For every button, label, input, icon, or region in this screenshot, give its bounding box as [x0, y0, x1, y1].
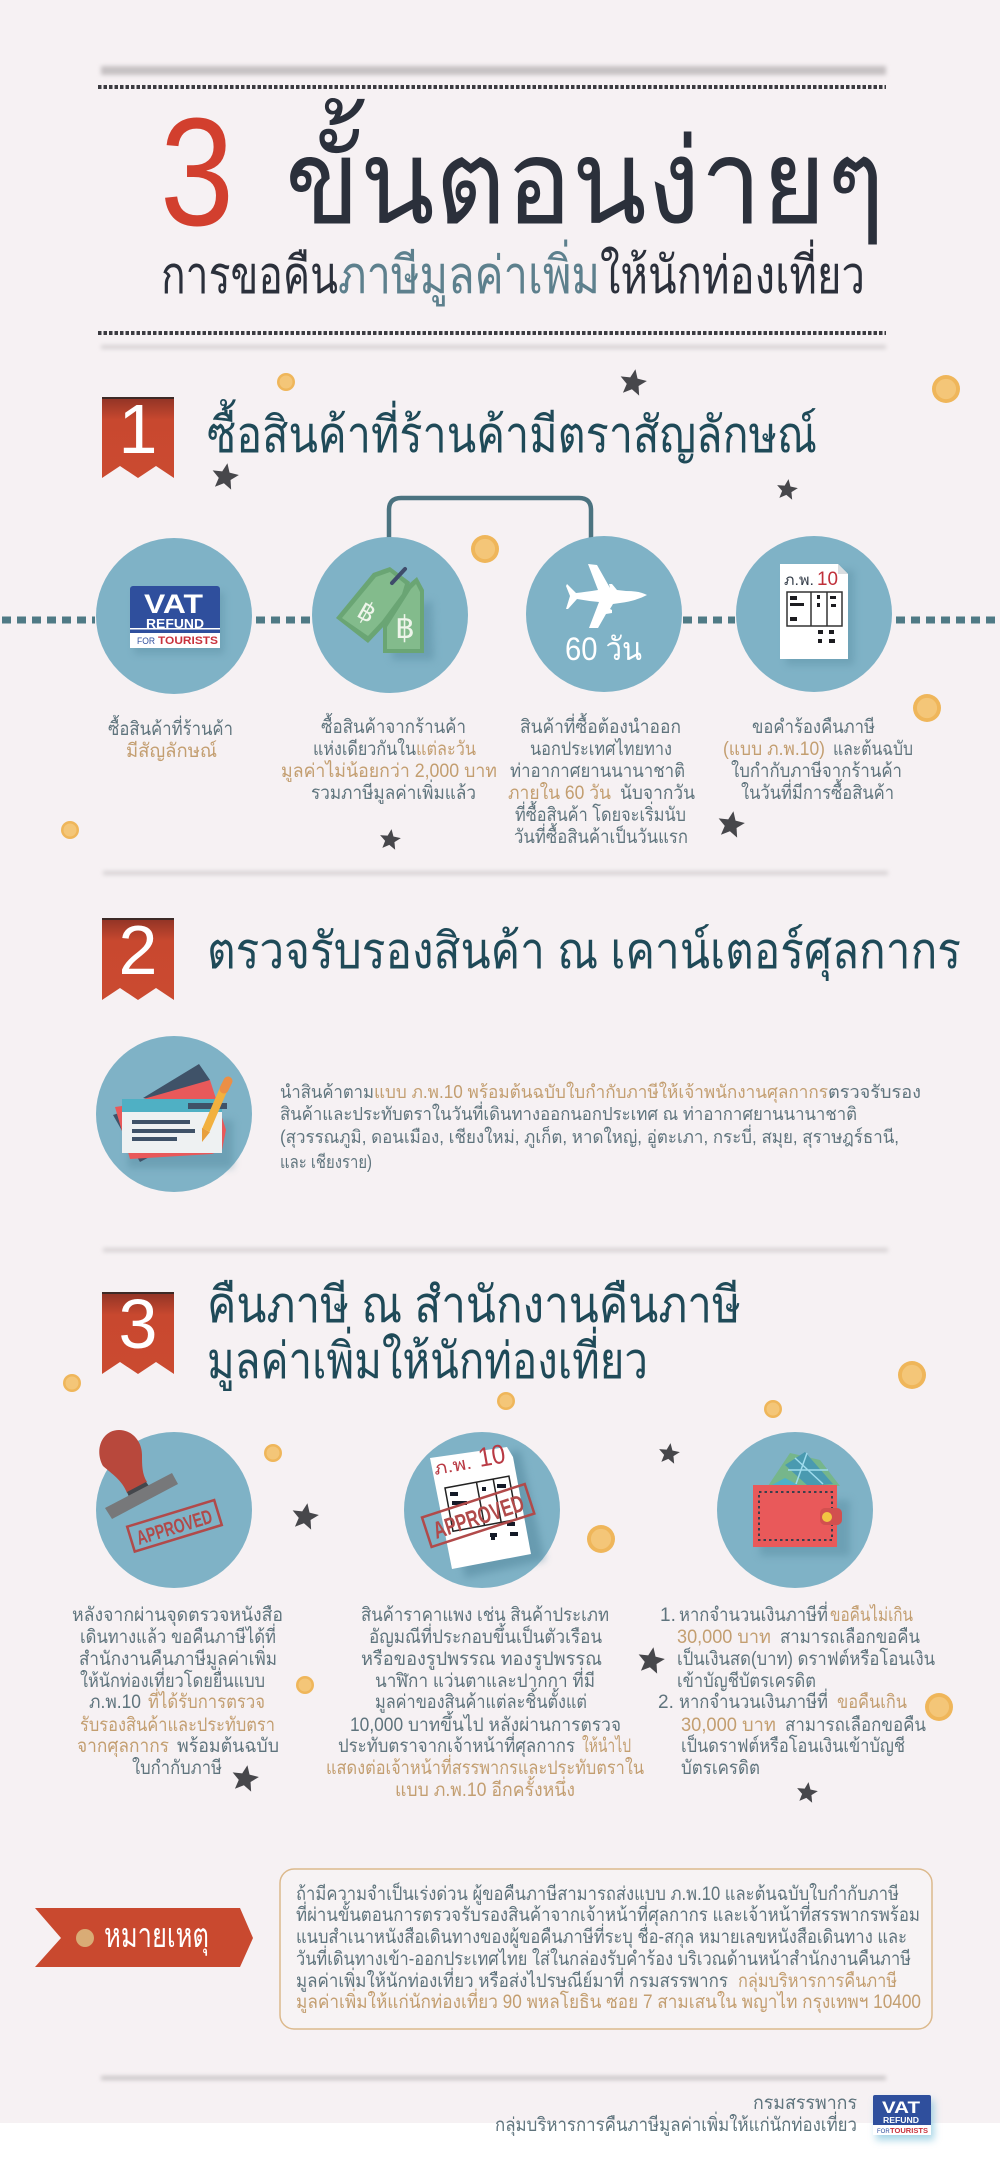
text: step 1 column 4: ในวันที่มีการซื้อสินค้า: [741, 779, 894, 804]
note box: ที่ผ่านขั้นตอนการตรวจรับรองสินค้าจากเจ้าหน้าที่ศุลกากร และเจ้าหน้าที่สรรพากรพร้อม: [296, 1901, 920, 1927]
footer VAT logo: TOURISTS: [890, 2128, 928, 2135]
ribbon: step 1: 1: [119, 390, 157, 468]
text: step 1 column 4: ขอคำร้องคืนภาษี: [752, 716, 875, 738]
text: step 1 column 2: แห่งเดียวกันใน: [313, 738, 416, 760]
footer VAT logo: REFUND: [883, 2116, 919, 2125]
text: step 1 column 2: [281, 713, 497, 804]
text: step 3 column 3: 1.: [660, 1605, 676, 1626]
note box: แนบสำเนาหนังสือเดินทางของผู้ขอคืนภาษีที่ระบุ ชื่อ-สกุล หมายเลขหนังสือเดินทาง และ: [296, 1923, 907, 1949]
text: step 3 column 2: อัญมณีที่ประกอบขึ้นเป็นตัวเรือน: [369, 1623, 602, 1648]
subtitle: [161, 239, 865, 307]
text: step 3 column 3: 2.: [658, 1692, 674, 1713]
text: step 3 column 2: ประทับตราจากเจ้าหน้าที่ศุลกากร: [338, 1732, 575, 1758]
text: step 3 column 3: สามารถเลือกขอคืน: [785, 1715, 926, 1736]
text: step 1 column 2: มูลค่าไม่น้อยกว่า 2,000 บาท: [281, 760, 497, 782]
icon: approved form: [404, 1432, 560, 1588]
text: step 3 column 2: หรือของรูปพรรณ ทองรูปพรรณ: [361, 1649, 602, 1670]
text: step 3 column 1: สำนักงานคืนภาษีมูลค่าเพิ่ม: [79, 1645, 277, 1670]
ribbon: step 3: [102, 1285, 174, 1374]
text: step 3 column 3: หากจำนวนเงินภาษีที่: [679, 1601, 828, 1626]
text: step 3 column 2: ให้นำไป: [582, 1735, 631, 1757]
heading: step 1: ซื้อสินค้าที่ร้านค้ามีตราสัญลักษณ์: [207, 399, 817, 463]
footer VAT logo: VAT: [882, 2098, 921, 2117]
text: step 3 column 1: จากศุลกากร: [77, 1736, 169, 1758]
text: step 2 description: สินค้าและประทับตราในวันที่เดินทางออกนอกประเทศ ณ ท่าอากาศยานนานาชาติ: [280, 1101, 857, 1124]
subtitle: ภาษีมูลค่าเพิ่ม: [338, 239, 600, 307]
heading: step 3: [207, 1277, 741, 1391]
text: step 3 column 3: [658, 1601, 935, 1779]
dashed timeline: [2, 616, 1000, 624]
note box: มูลค่าเพิ่มให้แก่นักท่องเที่ยว 90 พหลโยธิน ซอย 7 สามเสนใน พญาไท กรุงเทพฯ 10400: [296, 1988, 921, 2014]
ribbon: step 3: 3: [119, 1285, 157, 1363]
text: step 3 column 1: ใบกำกับภาษี: [132, 1757, 222, 1779]
text: step 3 column 2: 10,000 บาทขึ้นไป หลังผ่านการตรวจ: [350, 1711, 621, 1736]
ribbon: step 2: [102, 911, 174, 1000]
subtitle: การขอคืน: [161, 247, 338, 305]
text: step 1 column 1: [108, 715, 233, 762]
text: step 3 column 3: 30,000 บาท: [681, 1715, 776, 1736]
icon: approved form: ภ.พ.: [432, 1453, 473, 1479]
title: ขั้นตอนง่ายๆ: [285, 98, 885, 249]
text: step 3 column 1: เดินทางแล้ว ขอคืนภาษีได้ที่: [80, 1623, 276, 1648]
text: step 2 description: แบบ ภ.พ.10 พร้อมต้นฉบับใบกำกับภาษีให้เจ้าพนักงานศุลกากร: [374, 1081, 828, 1103]
heading: step 3: คืนภาษี ณ สำนักงานคืนภาษี: [207, 1277, 741, 1333]
text: step 1 column 4: [723, 716, 913, 804]
icon: VAT refund logo: REFUND: [146, 616, 204, 631]
note box: กลุ่มบริหารการคืนภาษี: [738, 1970, 897, 1993]
text: step 3 column 1: รับรองสินค้าและประทับตรา: [80, 1715, 275, 1736]
icon: airplane 60 days: 60 วัน: [565, 631, 642, 667]
text: step 3 column 3: หากจำนวนเงินภาษีที่: [679, 1688, 828, 1713]
icon: approved form: APPROVED: [430, 1490, 528, 1545]
title: 3: [160, 86, 234, 258]
icon: VAT refund logo: VAT: [144, 589, 204, 619]
ribbon: step 2: 2: [119, 911, 157, 989]
icon: form VAT 10: 10: [817, 569, 838, 590]
footer VAT logo: FOR: [877, 2129, 890, 2135]
text: step 1 column 3: นอกประเทศไทยทาง: [530, 738, 672, 760]
text: step 3 column 3: เป็นเงินสด(บาท) ดราฟต์หรือโอนเงิน: [677, 1646, 935, 1670]
note box: ถ้ามีความจำเป็นเร่งด่วน ผู้ขอคืนภาษีสามารถส่งแบบ ภ.พ.10 และต้นฉบับใบกำกับภาษี: [296, 1881, 899, 1905]
text: step 3 column 1: [72, 1605, 283, 1779]
heading: step 3: มูลค่าเพิ่มให้นักท่องเที่ยว: [207, 1327, 648, 1391]
text: step 3 column 2: นาฬิกา แว่นตาและปากกา ที่มี: [375, 1667, 595, 1692]
bracket connecting price and 60 days: [389, 498, 591, 538]
icon: VAT refund logo: TOURISTS: [158, 635, 218, 647]
text: step 3 column 3: เข้าบัญชีบัตรเครดิต: [677, 1670, 816, 1692]
icon: price tags: ฿: [395, 610, 415, 645]
icon: form VAT 10: [736, 536, 892, 692]
text: step 1 column 3: ท่าอากาศยานนานาชาติ: [510, 761, 685, 782]
text: step 2 description: (สุวรรณภูมิ, ดอนเมือง, เชียงใหม่, ภูเก็ต, หาดใหญ่, อู่ตะเภา, กระบี่, สมุย, สุราษฎร์ธานี,: [280, 1124, 899, 1148]
text: step 3 column 3: สามารถเลือกขอคืน: [780, 1627, 920, 1648]
text: step 2 description: [280, 1081, 921, 1172]
icon: approved stamp: APPROVED: [134, 1506, 215, 1550]
title: [160, 86, 885, 258]
icon: form VAT 10: ภ.พ.: [784, 572, 814, 589]
text: step 2 description: ตรวจรับรอง: [828, 1082, 921, 1102]
text: step 3 column 3: บัตรเครดิต: [681, 1758, 760, 1779]
text: step 1 column 3: สินค้าที่ซื้อต้องนำออก: [520, 713, 681, 738]
icon: approved form: 10: [476, 1439, 508, 1473]
icon: wallet with cards: [717, 1432, 873, 1588]
footer VAT logo: [873, 2095, 934, 2140]
text: step 1 column 1: ซื้อสินค้าที่ร้านค้า: [108, 715, 233, 740]
text: step 2 description: นำสินค้าตาม: [280, 1082, 374, 1102]
icon: documents and pencil: [96, 1036, 252, 1192]
text: step 1 column 2: แต่ละวัน: [416, 739, 476, 760]
icon: VAT refund logo: FOR: [137, 636, 155, 646]
note box: วันที่เดินทางเข้า-ออกประเทศไทย ใส่ในกล่องรับคำร้อง บริเวณด้านหน้าสำนักงานคืนภาษี: [296, 1945, 911, 1970]
text: step 1 column 3: ที่ซื้อสินค้า โดยจะเริ่มนับ: [515, 801, 686, 826]
text: step 3 column 2: แสดงต่อเจ้าหน้าที่สรรพากรและประทับตราใน: [326, 1754, 644, 1779]
decorative coins and stars: [61, 367, 960, 1803]
subtitle: ให้นักท่องเที่ยว: [600, 239, 865, 305]
icon: VAT refund logo: [96, 538, 252, 694]
text: step 1 column 4: ใบกำกับภาษีจากร้านค้า: [731, 760, 902, 782]
text: step 3 column 1: ให้นักท่องเที่ยวโดยยื่นแบบ: [80, 1667, 265, 1692]
icon: price tags: ฿: [352, 595, 382, 629]
text: step 1 column 2: รวมภาษีมูลค่าเพิ่มแล้ว: [311, 779, 476, 804]
icon: approved stamp: [96, 1430, 252, 1588]
text: step 1 column 4: และต้นฉบับ: [833, 739, 913, 760]
text: step 3 column 3: ขอคืนไม่เกิน: [830, 1604, 913, 1626]
icon: airplane 60 days: [526, 536, 682, 692]
text: step 3 column 1: ที่ได้รับการตรวจ: [148, 1688, 265, 1713]
text: step 1 column 4: (แบบ ภ.พ.10): [723, 739, 825, 760]
footer text: กรมสรรพากร: [753, 2093, 857, 2114]
icon: price tags: [312, 537, 468, 693]
footer text: [495, 2093, 857, 2137]
text: step 3 column 2: แบบ ภ.พ.10 อีกครั้งหนึ่ง: [395, 1776, 575, 1801]
text: step 1 column 3: นับจากวัน: [620, 783, 695, 804]
decorative shadow bars and dotted rules: [98, 66, 888, 2080]
text: step 3 column 3: ขอคืนเกิน: [837, 1692, 907, 1713]
text: step 1 column 2: ซื้อสินค้าจากร้านค้า: [321, 713, 466, 738]
text: step 3 column 1: หลังจากผ่านจุดตรวจหนังสือ: [72, 1605, 283, 1627]
ribbon: step 1: [102, 390, 174, 478]
text: step 2 description: และ เชียงราย): [280, 1152, 372, 1172]
note box: [280, 1869, 932, 2029]
footer text: กลุ่มบริหารการคืนภาษีมูลค่าเพิ่มให้แก่นักท่องเที่ยว: [495, 2111, 857, 2137]
text: step 1 column 3: ภายใน 60 วัน: [508, 782, 611, 804]
text: step 3 column 1: พร้อมต้นฉบับ: [177, 1736, 279, 1757]
text: step 3 column 1: ภ.พ.10: [89, 1692, 141, 1713]
text: step 3 column 2: [326, 1605, 644, 1801]
text: step 1 column 1: มีสัญลักษณ์: [126, 740, 217, 762]
text: step 3 column 2: สินค้าราคาแพง เช่น สินค้าประเภท: [361, 1605, 609, 1626]
text: step 3 column 3: เป็นดราฟต์หรือโอนเงินเข้าบัญชี: [681, 1733, 905, 1757]
note banner: หมายเหตุ: [104, 1917, 209, 1956]
note banner: [35, 1908, 253, 1967]
text: step 3 column 2: มูลค่าของสินค้าแต่ละชิ้นตั้งแต่: [375, 1688, 587, 1713]
text: step 3 column 3: 30,000 บาท: [677, 1627, 771, 1648]
text: step 1 column 3: วันที่ซื้อสินค้าเป็นวันแรก: [514, 823, 688, 848]
note box: มูลค่าเพิ่มให้นักท่องเที่ยว หรือส่งไปรษณีย์มาที่ กรมสรรพากร: [296, 1967, 728, 1992]
text: step 1 column 3: [508, 713, 695, 848]
